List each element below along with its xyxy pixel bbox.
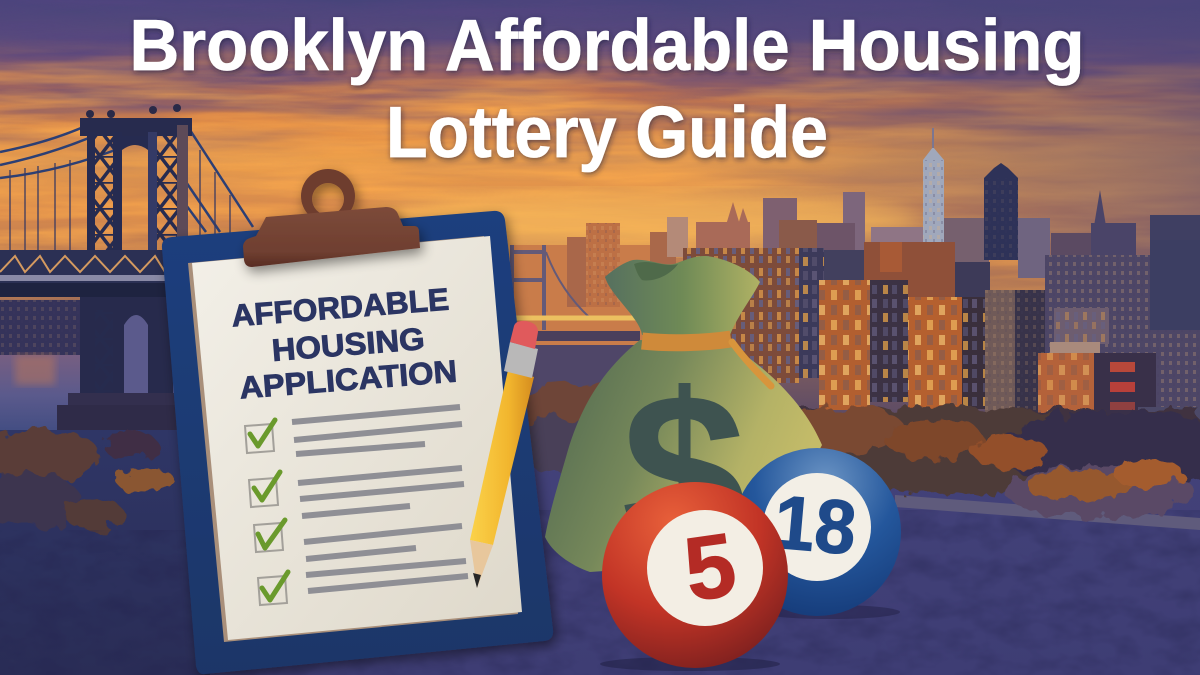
low brick apartment	[1038, 342, 1156, 421]
bridge deck	[0, 250, 170, 297]
paper sheet	[188, 236, 518, 642]
clip	[243, 169, 420, 267]
icon: pencil	[470, 321, 538, 588]
background: autumn tree line	[505, 382, 1200, 518]
dark tower	[984, 163, 1018, 260]
spire tower	[923, 128, 944, 298]
background: river and far shore	[0, 300, 240, 440]
dollar sign: $	[621, 346, 747, 598]
orange apartment tower one	[819, 280, 908, 410]
form heading: APPLICATION	[238, 354, 458, 406]
bridge tower lower and pier	[57, 297, 178, 431]
background: far skyline towers	[510, 128, 1200, 355]
check marks	[250, 420, 288, 600]
icon: clipboard with application form	[162, 169, 553, 674]
form heading: HOUSING	[271, 321, 426, 368]
clipboard board	[162, 211, 553, 674]
grey apartment tower	[985, 290, 1045, 420]
orange apartment tower two	[908, 297, 991, 413]
lottery ball: 18: 18	[770, 480, 860, 571]
lottery ball: 5	[600, 482, 788, 671]
brick block behind the bag	[683, 248, 864, 383]
Manhattan Bridge at left	[0, 104, 253, 431]
checkboxes	[245, 424, 287, 605]
background: left foliage	[0, 429, 210, 675]
form heading	[230, 282, 458, 406]
bridge cables	[0, 120, 253, 232]
checklist text lines	[292, 407, 468, 591]
title	[130, 6, 1084, 173]
title: Brooklyn Affordable Housing	[130, 6, 1084, 86]
bag neck and ruffle	[605, 256, 760, 335]
bridge tower upper	[80, 104, 192, 259]
lottery ball: 18	[733, 448, 901, 619]
icon: money bag with dollar sign	[545, 256, 822, 598]
background: Brooklyn apartment buildings	[683, 240, 1200, 447]
background: ground and riverbank	[0, 440, 1200, 675]
background: second distant bridge	[510, 245, 640, 405]
bag body	[545, 340, 822, 572]
bag tie	[642, 339, 771, 386]
lottery ball: 5: 5	[679, 515, 742, 621]
title: Lottery Guide	[386, 93, 828, 173]
form heading: AFFORDABLE	[230, 282, 450, 334]
background: sunset sky	[0, 0, 1200, 420]
